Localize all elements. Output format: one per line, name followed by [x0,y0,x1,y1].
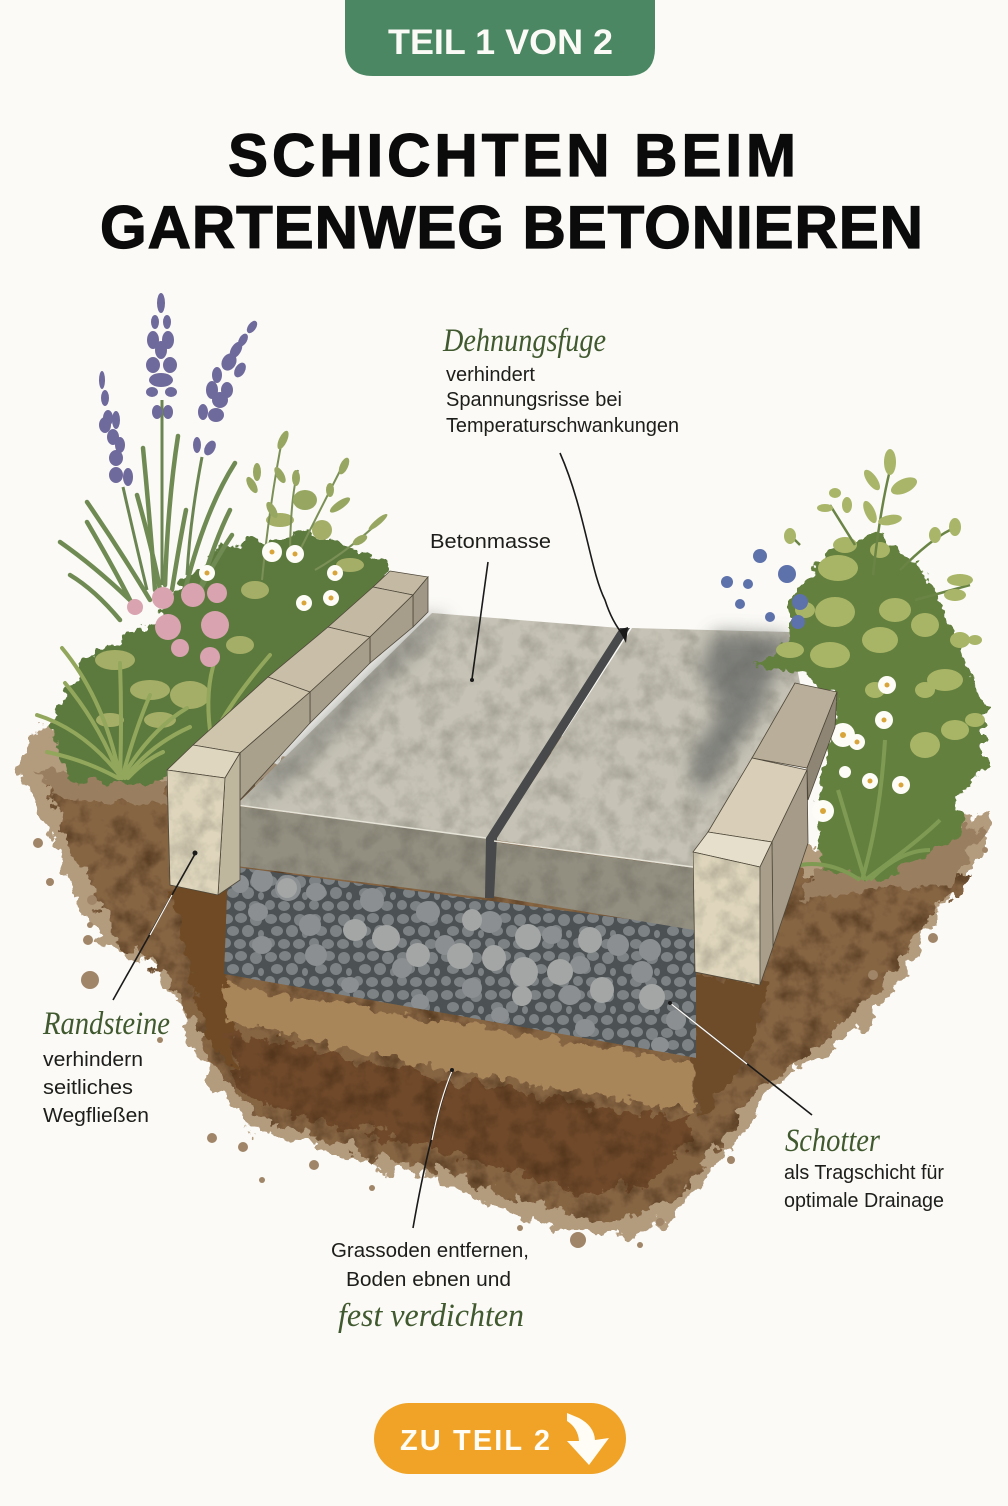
header pill [345,0,655,76]
curb stone 1 [193,677,310,800]
mid soil [45,740,975,1225]
title: SCHICHTEN BEIM [228,122,796,189]
flower centers [204,550,338,606]
white flowers [199,542,343,611]
title: GARTENWEG BETONIEREN [100,194,923,261]
callout: Dehnungsfuge: Dehnungsfuge [442,323,606,359]
callout: Schotter: optimale Drainage [784,1190,944,1212]
lavender flowers [99,293,259,486]
twigs with small leaves [244,429,389,580]
tall stems [123,400,202,590]
callout: Randsteine: Wegfließen [43,1105,149,1127]
lower flower stems [800,740,940,880]
pale front edges [236,805,693,867]
soil crumbs [33,838,988,1248]
curb stone 3 [328,587,413,663]
gravel layer [224,866,696,1058]
left plants [37,293,390,785]
light leaves [95,513,364,728]
compacted soil layer [222,985,693,1112]
callout: Grassoden: Boden ebnen und [346,1269,511,1291]
rear curb stone [752,683,837,800]
callout: Dehnungsfuge [442,323,679,643]
shaded back edge [240,615,450,800]
illustration: soil cross-section [20,720,990,1248]
icon: bent arrow [567,1413,609,1465]
callout: Grassoden: Grassoden entfernen, [331,1240,529,1262]
expansion joint [485,628,630,898]
callout: Schotter [668,1001,944,1212]
front curb stone [693,832,773,985]
button: zu Teil 2: ZU TEIL 2 [400,1425,550,1457]
bush mass [755,535,985,880]
callout: Schotter: Schotter [785,1123,880,1159]
warm soil left of gravel [170,880,240,1075]
title [100,122,923,261]
left concrete slab [236,613,693,898]
pale outer soil [20,720,990,1236]
top surface [495,628,800,868]
pale topsoil left [35,770,170,805]
upper twigs [790,470,970,600]
white flowers [812,676,910,822]
callout: Betonmasse [430,531,551,682]
warm soil right of gravel [690,975,770,1120]
front face [236,806,486,898]
right curb stones [693,683,837,985]
button: zu Teil 2 [374,1403,626,1474]
flower centers [820,682,904,814]
callout: Dehnungsfuge: verhindert [446,364,535,386]
callout: Dehnungsfuge: Spannungsrisse bei [446,389,622,411]
light leaves [776,537,985,758]
blue flowers [721,549,808,629]
left curb stones [167,571,428,895]
header pill: TEIL 1 VON 2 [388,23,613,62]
callout: Grassoden [331,1068,529,1334]
middle curb stone [708,758,808,947]
shadow on slab [690,632,790,800]
lower grass [37,648,270,778]
callout: Dehnungsfuge: Temperaturschwankungen [446,415,679,437]
curb stone 4 [373,571,428,627]
callout: Randsteine: Randsteine [42,1006,170,1042]
grass blades [60,436,235,620]
callout: Grassoden: fest verdichten [338,1298,524,1334]
pink flowers [127,583,229,667]
callout: Randsteine: verhindern [43,1049,143,1071]
right concrete slab [492,628,800,930]
foliage mass [50,530,390,785]
dark deep soil [225,1030,695,1190]
callout: Randsteine [42,850,197,1127]
callout: Randsteine: seitliches [43,1077,133,1099]
top surface [236,613,620,838]
callout: Schotter: als Tragschicht für [784,1162,944,1184]
front face [492,842,694,930]
right plants [721,449,985,880]
curb stone 2 [268,627,370,723]
small leaves [784,449,982,645]
callout: Betonmasse: Betonmasse [430,531,551,553]
pale topsoil right [800,825,985,900]
front curb stone [167,745,240,895]
